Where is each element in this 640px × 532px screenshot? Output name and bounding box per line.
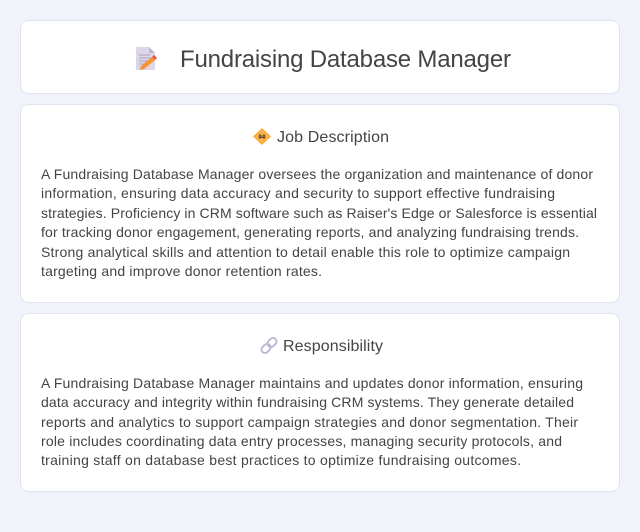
text block: job description: information, ensuring data accuracy and security to support effective fundraising [41,185,555,201]
text block: responsibility [41,375,583,468]
icon: document with pencil [136,47,157,70]
text block: job description [41,166,597,279]
text block: job description: for tracking donor engagement, generating reports, and analyzing fundraising trends. [41,224,579,240]
text block: responsibility: reports and analytics to support campaign strategies and donor segmentation. Their [41,414,578,430]
text block: responsibility: data accuracy and integrity within fundraising CRM systems. They generate detailed [41,394,574,410]
heading: responsibility: Responsibility [283,338,383,355]
panel: responsibility [20,314,620,492]
text block: job description: A Fundraising Database Manager oversees the organization and maintenance of donor [41,166,593,182]
panel: job description [20,104,620,302]
text block: job description: Strong analytical skills and attention to detail enable this role to optimize campaign [41,244,570,260]
icon: chain link [260,336,278,355]
text block: responsibility: training staff on database best practices to optimize fundraising outcomes. [41,452,521,468]
text block: job description: targeting and improve donor retention rates. [41,263,322,279]
text block: responsibility: A Fundraising Database Manager maintains and updates donor information, ensuring [41,375,583,391]
text block: job description: strategies. Proficiency in CRM software such as Raiser's Edge or Salesforce is essential [41,205,597,221]
title: Fundraising Database Manager [180,46,511,73]
panel: title card [20,20,620,94]
heading: job description: Job Description [277,129,389,146]
text block: responsibility: role includes coordinating data entry processes, managing security protocols, and [41,433,562,449]
icon: warning diamond [254,129,270,144]
